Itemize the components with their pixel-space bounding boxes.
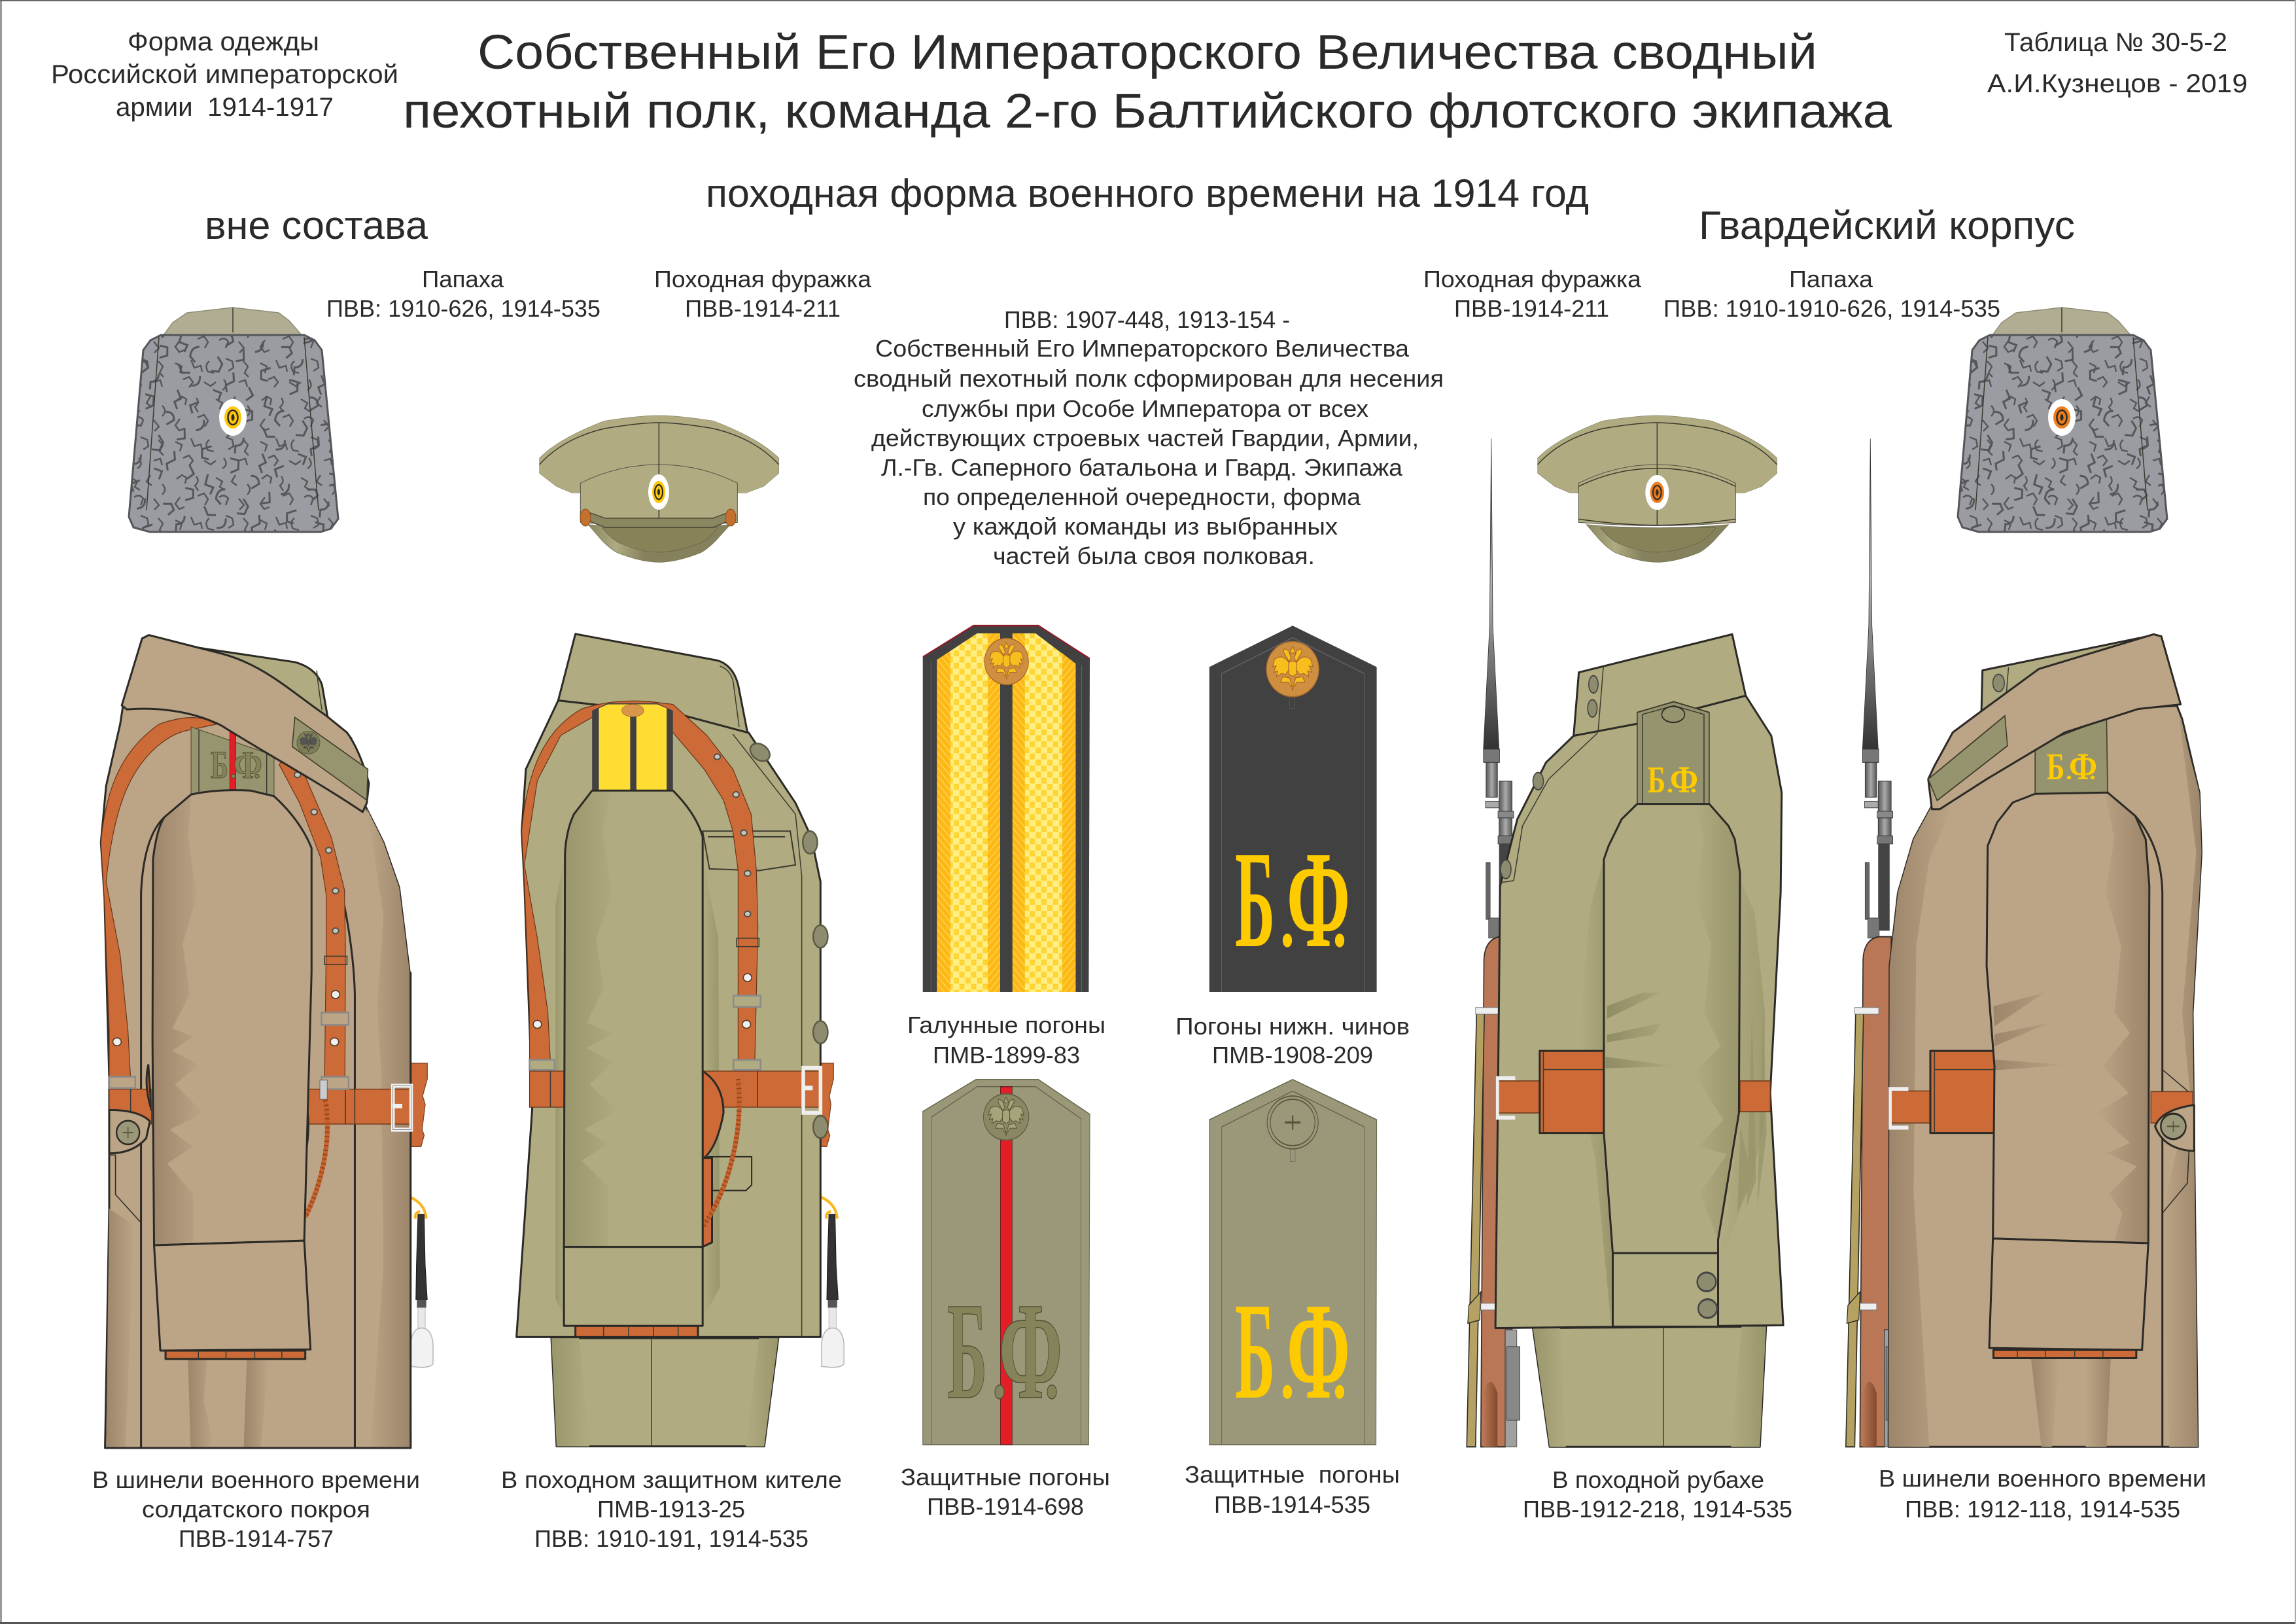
header note: top right: Таблица № 30-5-2 [2004,28,2227,57]
section heading left: вне состава [205,203,428,247]
figure: field shirt with rifle [1467,438,1783,1447]
title: Собственный Его Императорского Величества сводный [478,25,1817,79]
central description text: действующих строевых частей Гвардии, Армии, [871,425,1419,451]
central description text: сводный пехотный полк сформирован для несения [854,365,1444,392]
epaulette: galloon [923,626,1090,992]
figure: greatcoat right with rifle [1846,438,2202,1447]
central description text: службы при Особе Императора от всех [922,395,1368,422]
label: greatcoat left: солдатского покроя [142,1496,370,1523]
figure: field shirt with rifle: Ф [1670,758,1698,801]
central description text: у каждой команды из выбранных [953,513,1338,540]
epaulette: lower ranks black: . [1280,871,1295,965]
label: right field cap: ПВВ-1914-211 [1454,295,1609,322]
label: right field cap: Походная фуражка [1423,266,1642,292]
central description text: ПВВ: 1907-448, 1913-154 - [1004,306,1290,333]
icon: right field cap [1538,415,1777,562]
figure: greatcoat right with rifle: Б [2047,745,2064,788]
label: greatcoat left: В шинели военного времени [92,1466,420,1493]
label: field shirt: В походной рубахе [1552,1466,1764,1493]
label: protective epaulettes 1 [901,1464,1110,1520]
central description text: частей была своя полковая. [993,542,1315,569]
figure: greatcoat right with rifle: . [2066,758,2072,785]
label: field shirt: ПВВ-1912-218, 1914-535 [1523,1496,1792,1523]
label: greatcoat right [1879,1465,2206,1523]
label: protective epaulettes 1: Защитные погоны [901,1464,1110,1491]
epaulette: protective plain: . [1332,1322,1347,1417]
central description text [854,306,1444,569]
header note: top left: Форма одежды [128,27,319,56]
label: protective epaulettes 2: ПВВ-1914-535 [1214,1491,1370,1518]
subtitle: походная форма военного времени на 1914 год [706,171,1589,215]
epaulette: lower ranks black: Б [1235,822,1275,976]
epaulette: protective plain: Б [1235,1274,1275,1428]
epaulette: lower ranks black [1209,626,1377,992]
header note: top left: армии 1914-1917 [116,93,334,122]
icon: left field cap [540,415,779,562]
label: field tunic [501,1466,842,1552]
figure: greatcoat right with rifle: . [2089,758,2096,785]
label: greatcoat left: ПВВ-1914-757 [179,1525,334,1552]
label: galloon epaulettes [907,1012,1105,1068]
label: field tunic: ПМВ-1913-25 [597,1496,745,1523]
label: lower rank epaulettes: ПМВ-1908-209 [1212,1042,1373,1068]
label: right papakha: ПВВ: 1910-1910-626, 1914-535 [1663,295,2000,322]
label: field tunic: ПВВ: 1910-191, 1914-535 [534,1525,809,1552]
figure: field shirt with rifle: Б [1648,758,1665,801]
epaulette: protective with red stripe: . [992,1322,1007,1417]
label: lower rank epaulettes: Погоны нижн. чинов [1175,1013,1410,1040]
section heading right: Гвардейский корпус [1699,203,2075,247]
epaulette: protective with red stripe: . [1045,1322,1059,1417]
epaulette: lower ranks black: . [1332,871,1347,965]
frame edge top [0,0,2296,1]
epaulette: protective with red stripe: Б [947,1274,987,1428]
frame edge right [2295,0,2296,1624]
label: left field cap: Походная фуражка [654,266,872,292]
label: right field cap [1423,266,1642,322]
label: greatcoat right: ПВВ: 1912-118, 1914-535 [1905,1496,2180,1523]
header note: top right: А.И.Кузнецов - 2019 [1987,69,2248,98]
label: left field cap [654,266,872,322]
frame edge bottom [0,1622,2296,1624]
label: left papakha: ПВВ: 1910-626, 1914-535 [326,295,600,322]
central description text: Л.-Гв. Саперного батальона и Гвард. Экипажа [881,454,1403,481]
central description text: Собственный Его Императорского Величества [875,335,1410,362]
epaulette: protective plain [1209,1080,1377,1445]
label: galloon epaulettes: Галунные погоны [907,1012,1105,1038]
header note: top left [51,27,398,122]
label: galloon epaulettes: ПМВ-1899-83 [933,1042,1080,1068]
figure: greatcoat left: Б [211,743,228,786]
icon: right papakha [1958,308,2167,532]
label: protective epaulettes 2: Защитные погоны [1185,1461,1400,1488]
label: left papakha [326,266,600,322]
epaulette: lower ranks black: Ф [1287,822,1350,976]
figure: greatcoat left: . [230,757,237,783]
label: left papakha: Папаха [422,266,504,292]
label: field shirt [1523,1466,1792,1523]
figure: greatcoat left: Ф [234,743,262,786]
epaulette: protective with red stripe: Ф [999,1274,1062,1428]
label: lower rank epaulettes [1175,1013,1410,1068]
title [403,25,1892,138]
title: пехотный полк, команда 2-го Балтийского флотского экипажа [403,84,1892,138]
label: right papakha: Папаха [1789,266,1873,292]
header note: top right [1987,28,2248,98]
figure: field tunic [517,634,844,1446]
frame edge left [0,0,2,1624]
header note: top left: Российской императорской [51,60,398,89]
figure: greatcoat left: . [254,757,260,783]
epaulette: protective plain: Ф [1287,1274,1350,1428]
label: left field cap: ПВВ-1914-211 [685,295,841,322]
icon: left papakha [129,308,338,532]
figure: field shirt with rifle: . [1667,771,1673,798]
figure: greatcoat right with rifle: Ф [2069,745,2097,788]
label: protective epaulettes 2 [1185,1461,1400,1518]
central description text: по определенной очередности, форма [923,484,1361,510]
label: protective epaulettes 1: ПВВ-1914-698 [927,1493,1084,1520]
figure: greatcoat left [101,635,433,1448]
label: field tunic: В походном защитном кителе [501,1466,842,1493]
epaulette: protective with red stripe [923,1080,1090,1445]
label: right papakha [1663,266,2000,322]
label: greatcoat left [92,1466,420,1552]
epaulette: protective plain: . [1280,1322,1295,1417]
label: greatcoat right: В шинели военного времени [1879,1465,2206,1492]
figure: field shirt with rifle: . [1690,771,1697,798]
